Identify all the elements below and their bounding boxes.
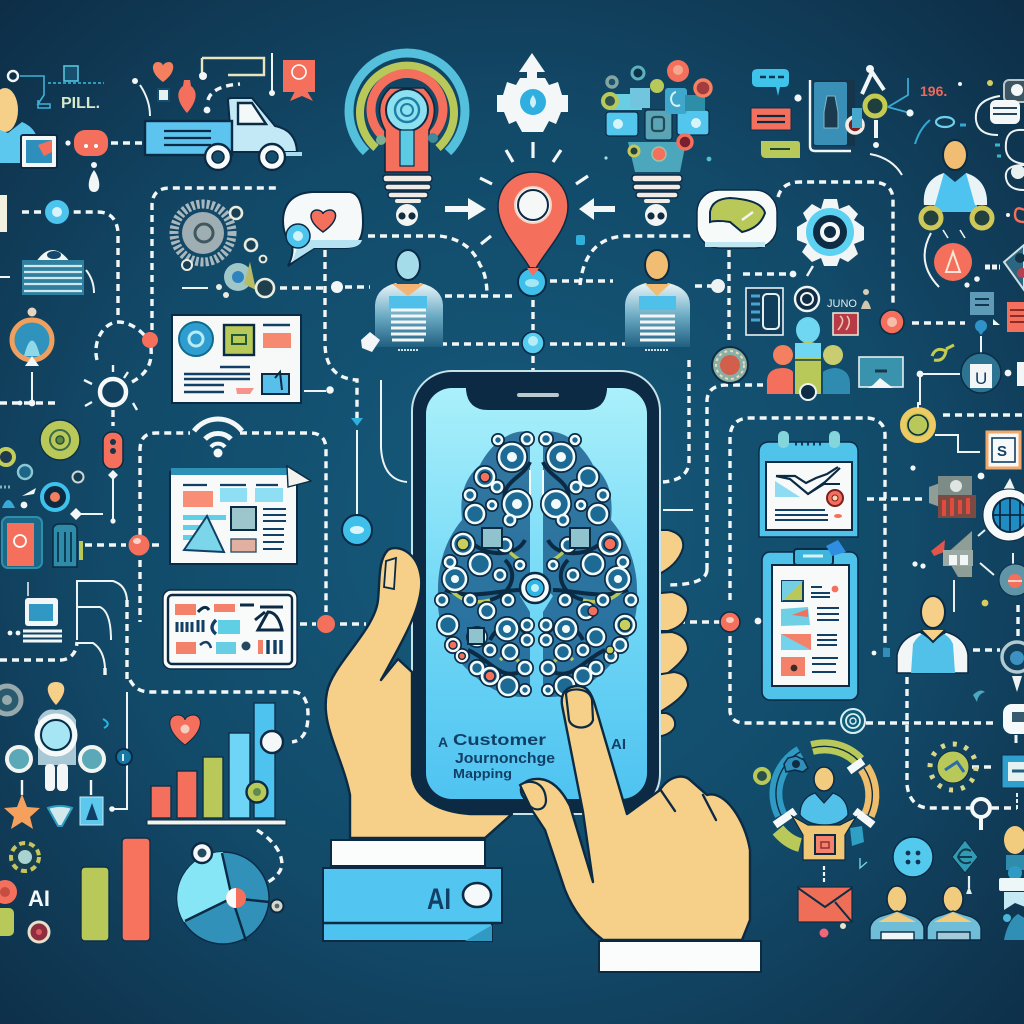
- left shirt cuff: [331, 840, 485, 866]
- icon: left arrow pointing to pin: [445, 198, 486, 220]
- icon: olive ring: [903, 402, 933, 440]
- right hand pointing: [520, 686, 750, 940]
- icon: coral eye node: [999, 564, 1024, 596]
- icons: right-edge robot cluster: [976, 80, 1024, 290]
- icon: white ring with rays: [84, 365, 137, 426]
- icon: S frame: [910, 432, 1020, 479]
- icon: gear: [797, 199, 864, 276]
- icon: ring target left: [0, 308, 60, 406]
- icon: lightbulb with colored arcs: [349, 53, 465, 172]
- person: right figure: [625, 250, 690, 350]
- icon: gear left edge: [0, 686, 21, 714]
- icon: white monitor badge: [1003, 704, 1024, 743]
- icon: person with rings: [7, 682, 104, 795]
- icon: coral node right of card: [317, 615, 335, 633]
- left sleeve with AI label: AI: [427, 883, 451, 916]
- panel: calendar with line chart: [759, 431, 858, 537]
- icon: small blue node: [872, 642, 1024, 702]
- icon: eye with data stripes: [0, 250, 94, 295]
- phone screen title: AI: [611, 736, 626, 753]
- icon: laptop: [8, 582, 62, 641]
- person: right edge stack: [999, 826, 1024, 940]
- icon: right bulb with app tiles: [603, 60, 711, 172]
- dashed journey connectors: [0, 182, 1024, 887]
- bottom-left AI badges: AI: [28, 886, 50, 911]
- phone screen title: Customer: [453, 732, 546, 749]
- chart: big bars: [81, 838, 150, 941]
- icon: right edge tile: [972, 755, 1024, 830]
- icon: monitor: [859, 357, 903, 388]
- icon: coral node left of clipboard: [720, 612, 761, 632]
- chart: pie: [177, 843, 284, 944]
- icon: grey video tiles: [912, 476, 988, 612]
- icon: coral chat pill: [65, 130, 142, 192]
- icon: chat bubble with heart: [283, 192, 363, 266]
- icon: U device node: [917, 353, 1024, 393]
- icon: coral circle with triangle: [925, 233, 1000, 288]
- people: team of three: [767, 317, 850, 400]
- icon: teal server: [53, 524, 83, 567]
- icon: brain badge: [712, 347, 748, 383]
- diagram: customer cycle donut: [755, 746, 873, 882]
- icon: location pin: [498, 172, 568, 274]
- right shirt cuff: [599, 941, 761, 972]
- icons: triangle and blue tile: [48, 797, 115, 826]
- icon: rays around location pin: [480, 142, 588, 244]
- icon: coral node: [142, 332, 158, 348]
- brain centre node: [520, 573, 550, 603]
- people: two seated figures: [870, 886, 981, 940]
- icon: neural gear: [174, 204, 343, 298]
- icon: coral node top right: [880, 310, 904, 334]
- icon: wifi signal: [194, 419, 242, 458]
- icon: delivery truck: [145, 98, 302, 170]
- icons: right cards and pin: [932, 292, 1024, 360]
- caption: small red label: [915, 82, 966, 144]
- phone screen title: [438, 732, 626, 781]
- left hand holding phone: [326, 548, 512, 838]
- panel: small data frame: [746, 271, 796, 335]
- icon: ribbon badge: [283, 60, 315, 101]
- icon: play ring and label: JUNO: [827, 298, 857, 310]
- small node beside phone: [327, 387, 372, 545]
- phone screen title: Journonchge: [455, 750, 555, 767]
- phone screen title: Mapping: [453, 766, 512, 781]
- icon: blue node: [103, 719, 132, 765]
- icon: chat bubble with check: [576, 190, 777, 293]
- caption: network label: [8, 66, 104, 112]
- icon: right arrow pointing to pin: [579, 198, 615, 220]
- brain illustration: [437, 431, 637, 697]
- icon: coral device: [2, 517, 42, 568]
- person: figure with olive rings: [921, 140, 992, 238]
- icons above truck: [132, 53, 275, 116]
- panel: report card one: [172, 315, 334, 403]
- icon: play ring and label: [795, 287, 871, 335]
- icon: phone with rings: [810, 65, 914, 175]
- bottom-left AI badges: [0, 843, 50, 942]
- icon: button: [893, 837, 933, 877]
- phone: [412, 371, 660, 814]
- icon: coral junction node: [128, 534, 150, 556]
- icon: right fingers behind phone: [650, 530, 688, 738]
- icon: right bulb base: [632, 175, 682, 226]
- icon: envelope: [798, 887, 852, 938]
- panel: dashboard card with flag: [170, 466, 311, 564]
- panel: analytics card: [163, 590, 297, 669]
- icon: star: [4, 794, 40, 829]
- icon: heart: [170, 715, 200, 745]
- icon: teal diamond: [952, 840, 978, 894]
- icon: blue node under pin: [518, 268, 546, 296]
- icon: S frame: S: [997, 443, 1007, 460]
- panel: clipboard checklist: [762, 540, 858, 700]
- icon: lower blue node: [522, 332, 544, 354]
- icon: left person with picture frame: [0, 88, 57, 168]
- caption: small red label: 196.: [920, 83, 947, 99]
- caption: network label: PILL.: [61, 95, 100, 112]
- icon: gear with up arrow: [497, 53, 568, 132]
- bar chart: ascending bars: [147, 703, 286, 825]
- icons: left circle cluster: [0, 420, 84, 510]
- icon: U device node: U: [975, 369, 987, 388]
- icon: lightbulb base: [383, 175, 432, 226]
- icon: side node: [0, 195, 69, 232]
- person: right figure with blue shirt: [897, 596, 968, 673]
- icon: coral pill switch: [70, 432, 123, 524]
- brain ring network: [437, 434, 636, 695]
- icon: globe: [978, 478, 1024, 575]
- phone screen title: A: [438, 734, 448, 750]
- icon: olive gear sun: [930, 744, 976, 790]
- person: left figure: [361, 250, 443, 352]
- left sleeve with AI label: [322, 868, 502, 941]
- icons: top-right list cards: [751, 69, 802, 158]
- icon: spiral node: [841, 709, 865, 733]
